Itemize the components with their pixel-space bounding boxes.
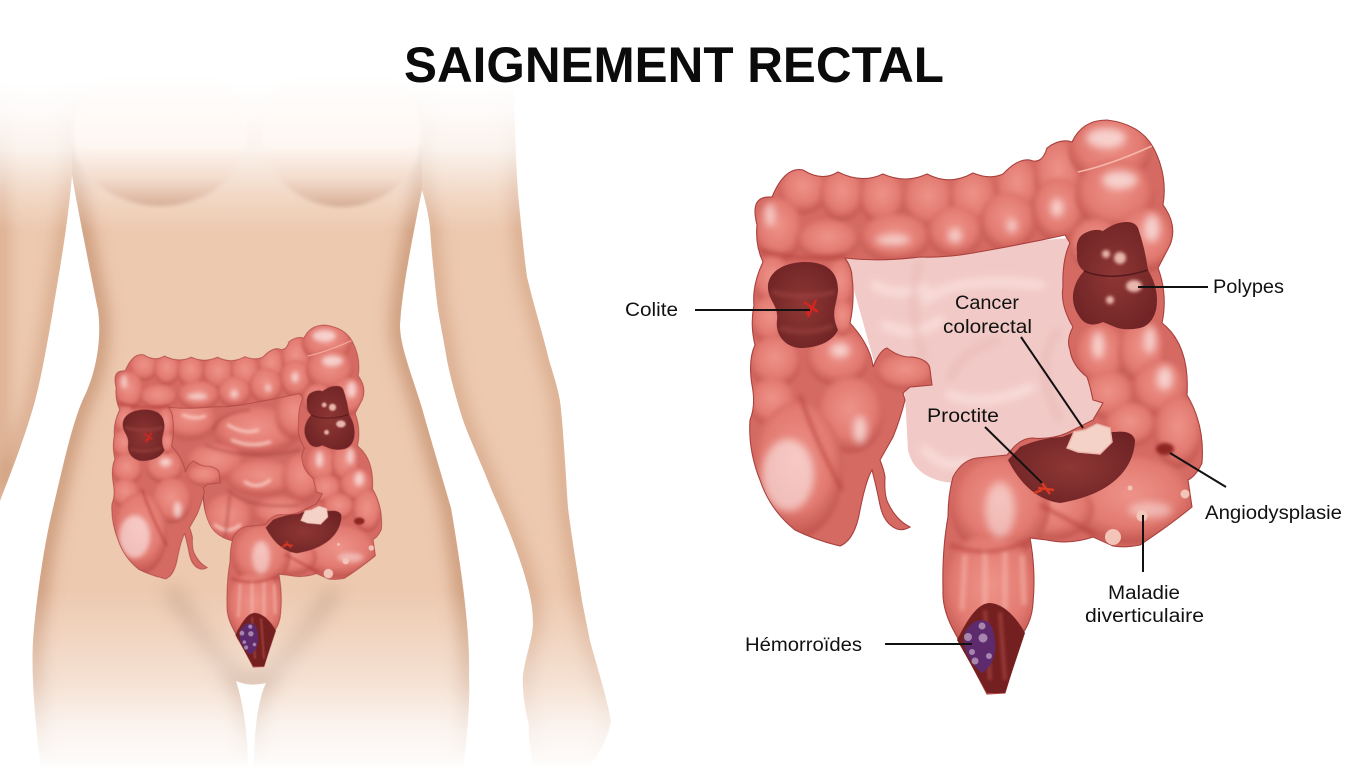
colon xyxy=(748,116,1202,694)
label: Maladie diverticulaire xyxy=(1085,515,1204,627)
label: Maladie diverticulaire: diverticulaire xyxy=(1085,606,1204,627)
label: Cancer colorectal: colorectal xyxy=(943,317,1032,338)
label: Proctite xyxy=(927,406,1042,483)
label: Cancer colorectal xyxy=(943,293,1083,428)
breasts xyxy=(72,57,422,207)
label: Hémorroïdes: Hémorroïdes xyxy=(745,635,862,656)
torso and legs xyxy=(33,60,469,768)
label: Proctite: Proctite xyxy=(927,406,999,427)
label: Angiodysplasie xyxy=(1170,453,1342,524)
panel: body figure xyxy=(0,60,611,768)
small intestine, body xyxy=(169,394,322,541)
left arm xyxy=(0,114,72,501)
label: Angiodysplasie: Angiodysplasie xyxy=(1205,503,1342,524)
colon, body xyxy=(111,323,382,667)
title: SAIGNEMENT RECTAL xyxy=(404,37,944,93)
label: Cancer colorectal: Cancer xyxy=(955,293,1020,314)
label: Maladie diverticulaire: Maladie xyxy=(1108,583,1180,604)
panel: colon diagram xyxy=(748,116,1202,694)
label: Polypes: Polypes xyxy=(1213,277,1284,298)
small intestine, diagram xyxy=(845,236,1115,483)
right arm xyxy=(422,60,611,765)
label: Colite: Colite xyxy=(625,300,678,321)
